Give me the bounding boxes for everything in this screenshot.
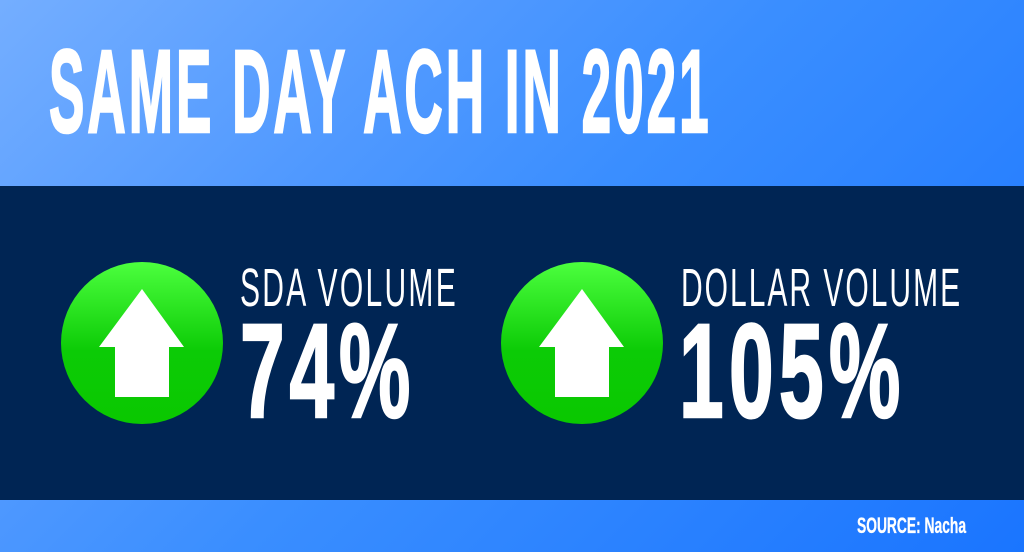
title: SAME DAY ACH IN 2021 — [49, 26, 709, 158]
label: dollar volume: DOLLAR VOLUME — [681, 258, 960, 318]
label: SDA volume: SDA VOLUME — [240, 258, 456, 318]
stat: dollar volume — [501, 258, 960, 446]
value: 105%: 105% — [679, 297, 900, 446]
value: 74%: 74% — [240, 297, 410, 446]
stat: SDA volume — [61, 258, 456, 446]
icon: green up arrow — [61, 262, 223, 424]
icon: green up arrow — [501, 262, 663, 424]
panel: dark stats band — [0, 186, 1024, 500]
